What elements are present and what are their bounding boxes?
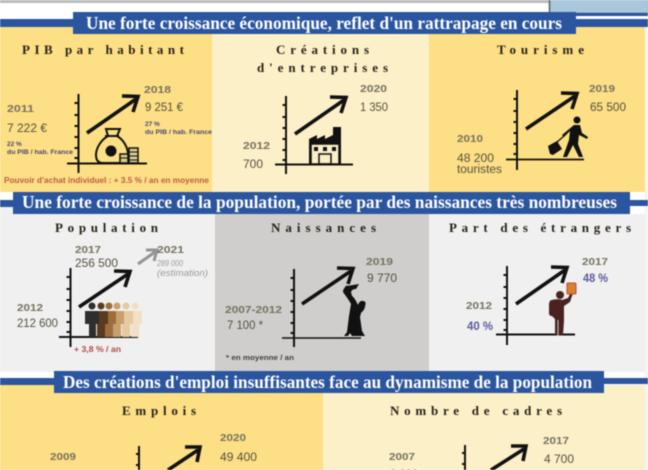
values: créations: 1 350 [360,102,388,114]
start values 2011: du PIB / hab. France [7,149,73,156]
icon: mother carrying child [343,284,366,336]
values: cadres [389,435,574,470]
values: population: 2021 [157,244,184,256]
heading: Nombre de cadres: Nombre de cadres [390,403,562,418]
values: étrangers [466,256,608,333]
values: population: 2012 [17,302,43,314]
panel: Créations d'entreprises: d'entreprises [257,60,388,75]
start values 2011: 2011 [7,103,34,115]
values: naissances: 2007-2012 [225,304,282,316]
values: population: (estimation) [157,268,208,278]
end values 2018: 9 251 € [145,102,184,114]
top-right image fragment [550,0,648,14]
chart axes and arrow: tourisme [506,90,584,170]
icon: money bag and coins [96,129,138,163]
icon: people in skin tones [85,302,142,337]
panel: Naissances [215,214,429,372]
title: croissance économique: Une forte croissance économique, reflet d'un rattrapage en cours [86,13,562,33]
values: emplois: 2020 [220,432,246,444]
note: growth rate: + 3,8 % / an [74,345,121,354]
start values 2011: 7 222 € [7,123,48,135]
chart axes and arrow: naissances [282,268,361,347]
icon: factory [309,127,341,164]
values: étrangers: 40 % [467,321,493,333]
chart axes and arrow: créations [275,96,353,174]
values: tourisme: 65 500 [590,102,626,114]
panel: Emplois [0,385,323,470]
panel: Part des étrangers [429,214,645,372]
end values 2018: 27 % [145,121,160,128]
heading: PIB par habitant: PIB par habitant [22,42,185,57]
heading: Emplois: Emplois [122,403,196,418]
values: naissances [225,256,397,362]
values: tourisme [457,83,626,176]
chart axes and arrow: emplois [136,446,200,470]
heading: Naissances: Naissances [271,220,376,235]
chart axes and arrow: étrangers [496,266,575,345]
values: naissances: * en moyenne / an [226,355,294,362]
values: tourisme: touristes [457,164,502,176]
start values 2011: 22 % [7,141,22,148]
end values 2018: 2018 [144,84,171,96]
title: créations d'emploi: Des créations d'emploi insuffisantes face au dynamisme de la population [63,372,592,392]
values: étrangers: 2017 [582,256,608,268]
values: emplois: 2009 [50,451,76,463]
values: tourisme: 48 200 [457,153,494,165]
chart axes and arrow: PIB [67,94,147,173]
values: population: 2017 [75,244,101,256]
title: croissance de la population: Une forte croissance de la population, portée par des naissances très nombreuses [22,192,617,212]
panel: Créations d'entreprises [212,27,429,192]
values: cadres: 2007 [389,451,415,463]
chart axes and arrow: population [59,268,138,347]
values: naissances: 7 100 * [227,320,264,332]
values: créations: 700 [243,159,263,171]
values: population [17,244,208,330]
values: tourisme: 2019 [589,83,615,95]
heading: Part des étrangers: Part des étrangers [449,220,631,235]
end values 2018: du PIB / hab. France [145,129,212,136]
chart axes and arrow: cadres [462,445,526,470]
values: créations [243,83,388,171]
panel: Population [0,214,215,372]
values: emplois: 49 400 [220,452,257,464]
values: population: 212 600 [17,318,58,330]
values: étrangers: 2012 [466,300,492,312]
values: tourisme: 2010 [457,133,483,145]
panel: Nombre de cadres [323,385,645,470]
values: étrangers: 48 % [583,273,608,285]
values: population: 256 500 [75,258,118,270]
values: créations: 2012 [243,140,270,152]
icon: person raising a flag [549,283,576,336]
arrow: grey projection [138,250,157,264]
values: population: 289 000 [156,259,183,268]
heading: Tourisme: Tourisme [497,42,584,57]
values: cadres: 2017 [543,435,569,447]
values: naissances: 9 770 [367,273,397,285]
heading: Population: Population [55,220,159,235]
start values 2011 [7,103,73,156]
values: emplois [50,432,257,464]
end values 2018 [144,84,212,136]
note: pouvoir d'achat: Pouvoir d'achat individuel : + 3.5 % / an en moyenne [4,176,210,185]
values: naissances: 2019 [366,256,393,268]
panel: Tourisme [429,27,645,192]
values: créations: 2020 [360,83,387,95]
values: cadres: 4 700 [544,454,574,466]
panel: PIB par habitant [0,27,212,192]
icon: traveller with suitcase [548,116,588,157]
heading: Créations d'entreprises: Créations [276,42,369,57]
